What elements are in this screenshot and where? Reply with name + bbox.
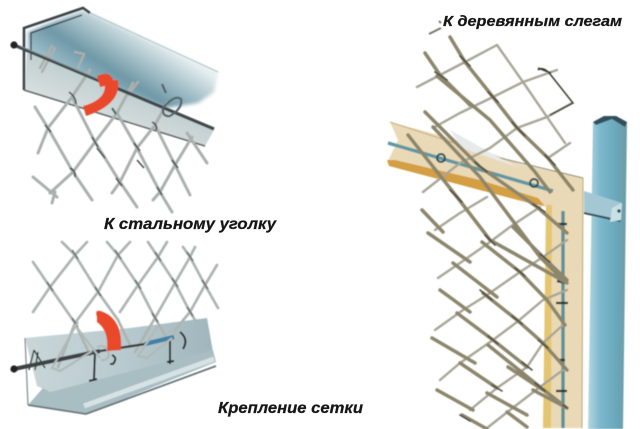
- mesh twists, top: [45, 84, 181, 195]
- right mesh: hook wire: [538, 68, 573, 115]
- stray wire, heading: [429, 21, 441, 34]
- steel angle, top: [24, 8, 218, 146]
- right mesh: thick diagonal wires: [408, 37, 573, 429]
- red arrow, top: [83, 74, 118, 116]
- steel angle, bottom: [25, 318, 216, 414]
- staples, bottom mesh: [52, 322, 176, 371]
- rod, bottom: [10, 332, 185, 381]
- right mesh: thin cross wires: [417, 45, 572, 428]
- red arrow, bottom: [96, 311, 121, 351]
- heading: steel angle: К стальному уголку: [104, 216, 277, 233]
- twists, bottom mesh: [47, 250, 208, 327]
- bottom mesh: [33, 242, 218, 367]
- wooden frame: [387, 122, 583, 428]
- right mesh: dark highlights: [435, 56, 567, 421]
- rod, top: [10, 41, 214, 129]
- top mesh: [33, 46, 207, 212]
- steel post: [584, 116, 627, 429]
- rods on frame: [388, 143, 568, 428]
- heading: mesh fastening: Крепление сетки: [218, 400, 363, 417]
- heading: wooden rails: К деревянным слегам: [443, 14, 622, 30]
